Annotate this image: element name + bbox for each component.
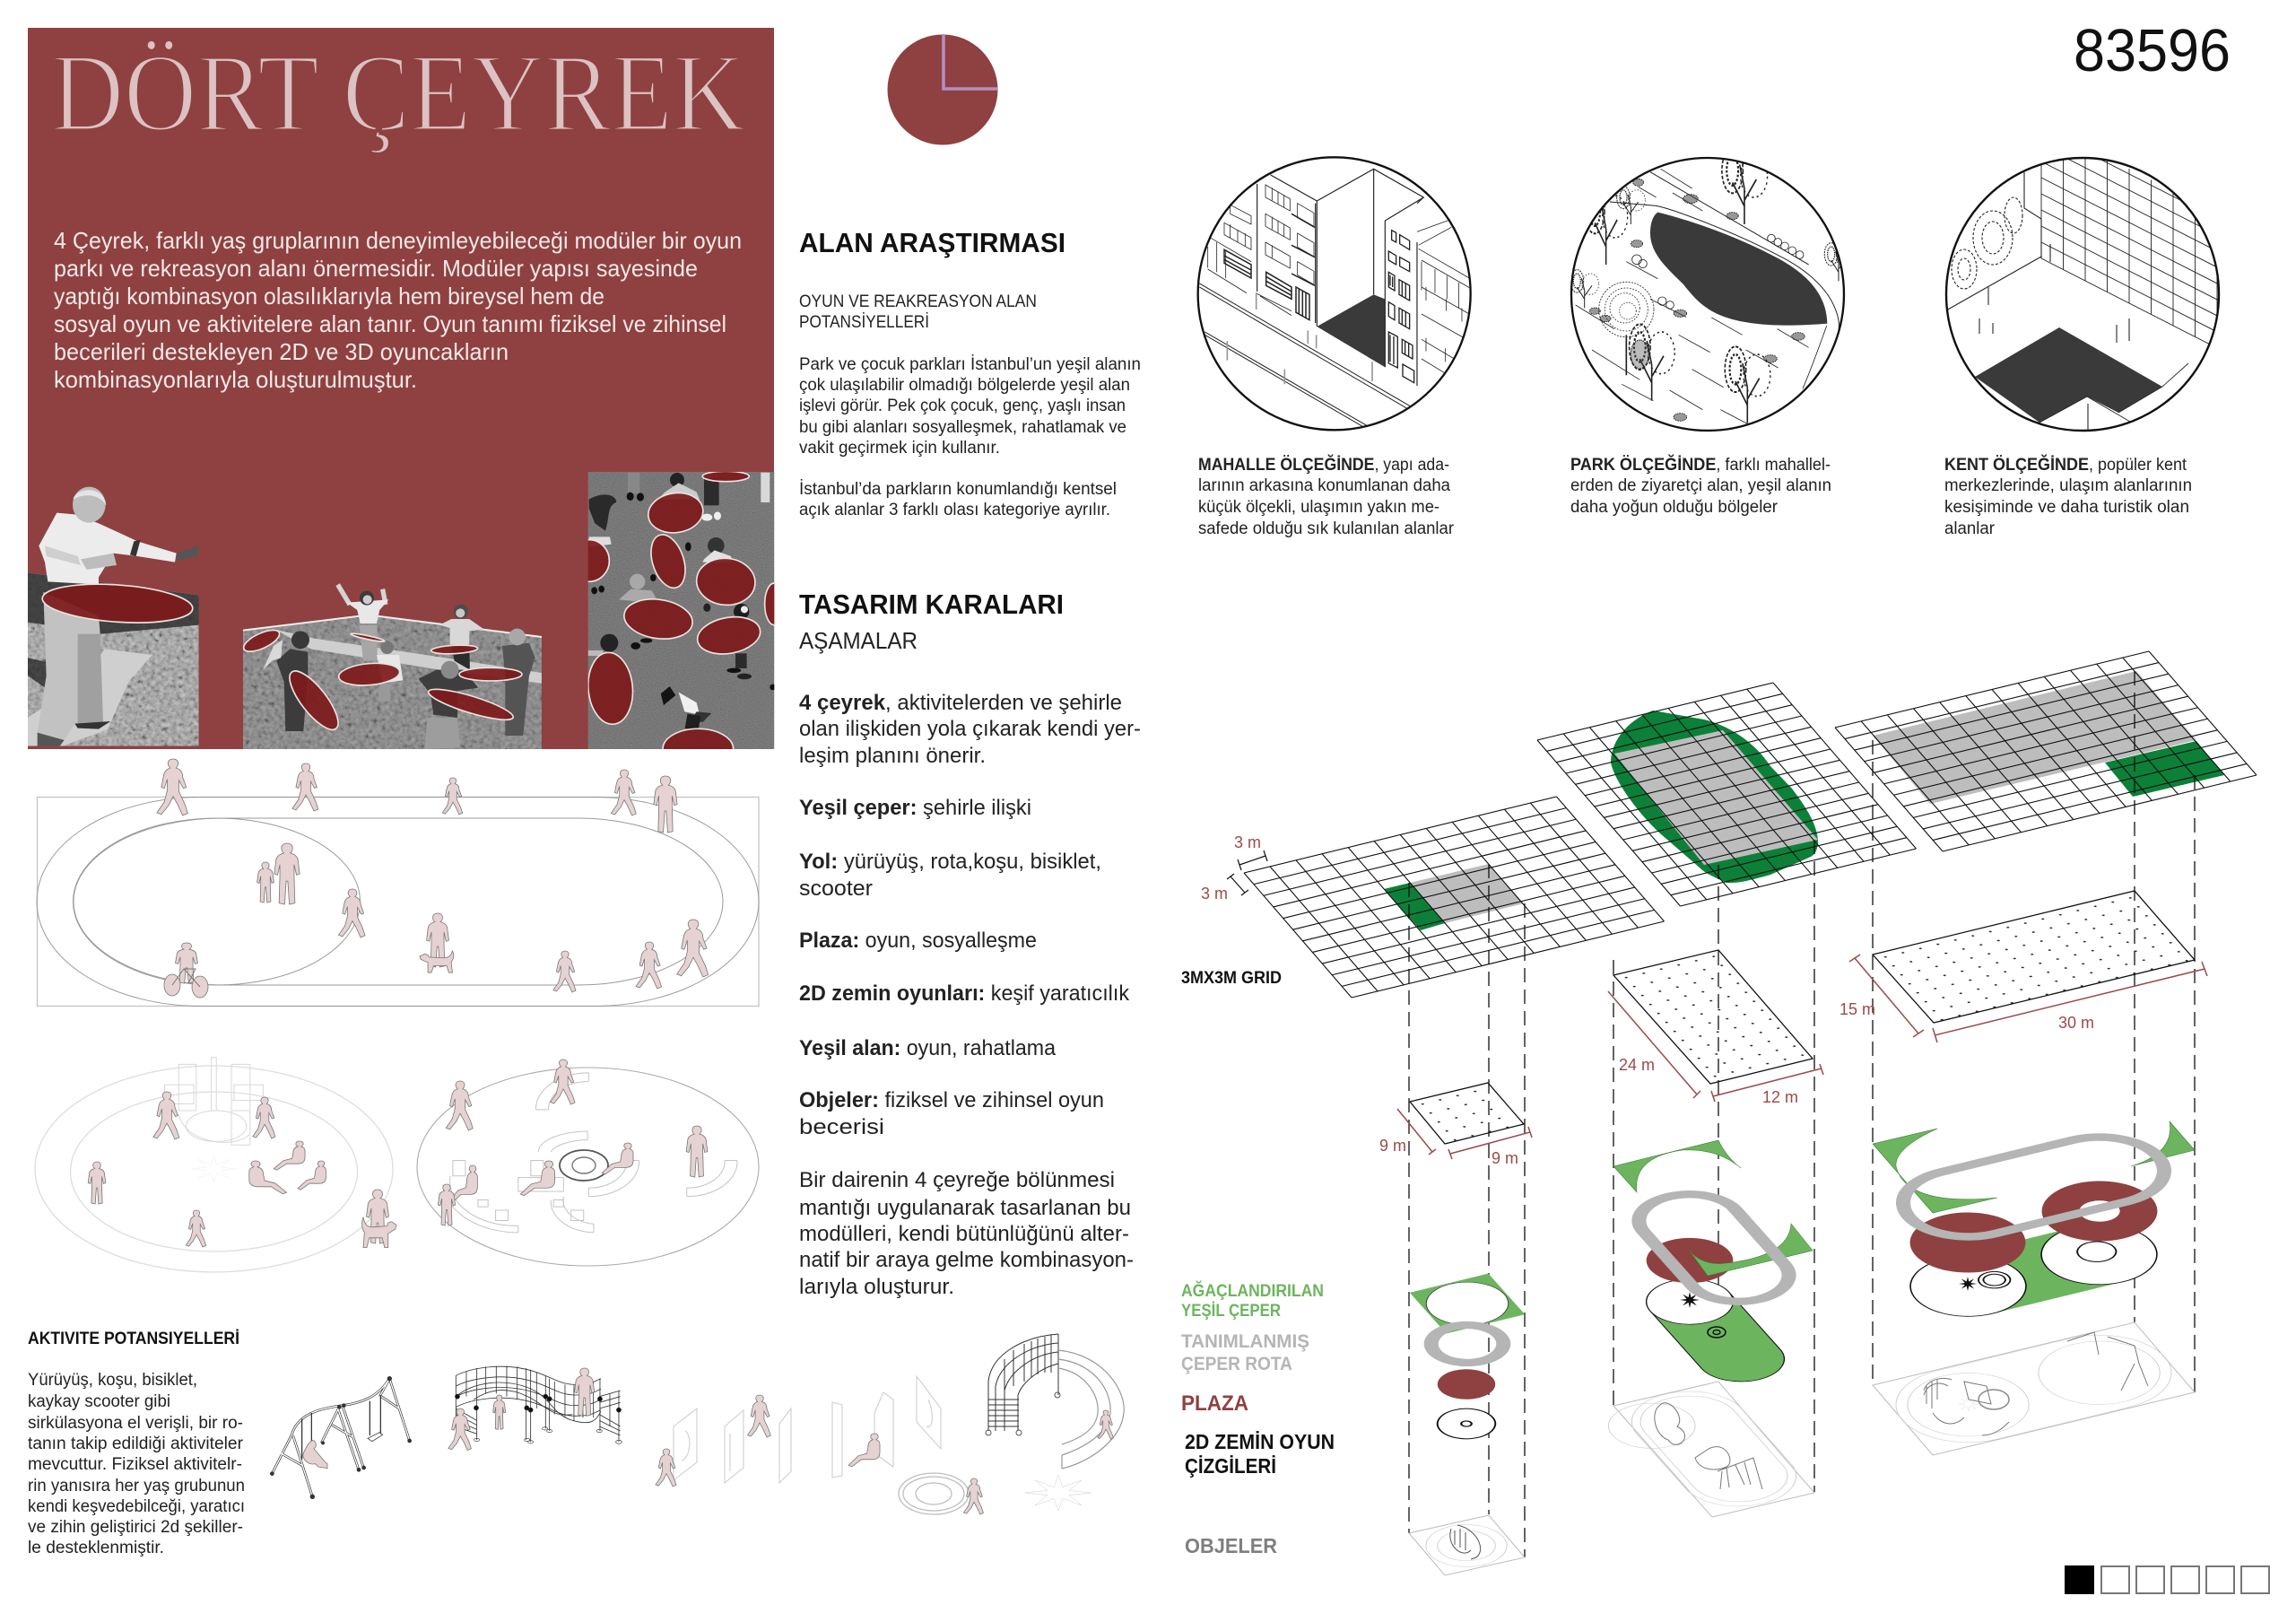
layer: green edge corners bbox=[1613, 1140, 1813, 1276]
dotted plot: 9 x 9 m bbox=[1379, 1083, 1532, 1167]
dotted plot: 9 x 9 m: 9 m bbox=[1379, 1137, 1406, 1155]
intro paragraph bbox=[54, 227, 742, 393]
caption: park scale bbox=[1570, 455, 1831, 517]
track diagram with users bbox=[37, 759, 759, 1007]
dotted plot: 30 x 15 m bbox=[1839, 891, 2207, 1042]
dark bushes bbox=[1589, 179, 1805, 421]
caption: neighbourhood scale bbox=[1198, 455, 1455, 538]
object: walls with holes bbox=[656, 1376, 941, 1487]
photo: man with hoop bbox=[28, 487, 199, 746]
text block: site research: ALAN ARAŞTIRMASI bbox=[799, 227, 1065, 258]
legend: layers: ÇİZGİLERİ bbox=[1185, 1454, 1276, 1478]
object: swing bbox=[270, 1376, 412, 1499]
hoop bbox=[41, 580, 194, 627]
text block: site research: Park ve çocuk parkları İstanbul’un yeşil alanın bbox=[799, 355, 1141, 374]
intro paragraph: 4 Çeyrek, farklı yaş gruplarının deneyimleyebileceği modüler bir oyun bbox=[54, 227, 742, 254]
benches bbox=[443, 1073, 737, 1233]
dotted plot: 30 x 15 m: 15 m bbox=[1839, 1000, 1875, 1018]
object: curved net and slide bbox=[986, 1334, 1124, 1469]
object: net wall bbox=[448, 1366, 622, 1451]
caption: city scale: KENT ÖLÇEĞİNDE, popüler kent bbox=[1944, 455, 2187, 475]
text block: design decisions: AŞAMALAR bbox=[799, 627, 918, 654]
text block: activity potentials: kaykay scooter gibi bbox=[28, 1392, 170, 1411]
layer: green capsule with 2d disc bbox=[1632, 1272, 1798, 1389]
text block: site research bbox=[799, 227, 1141, 519]
caption: neighbourhood scale: larının arkasına konumlanan daha bbox=[1198, 476, 1450, 495]
layer: 2d play lines bbox=[1428, 1404, 1505, 1443]
text block: site research: bu gibi alanları sosyalleşmek, rahatlamak ve bbox=[799, 418, 1126, 437]
legend: layers: TANIMLANMIŞ bbox=[1181, 1331, 1309, 1352]
title: DÖRT ÇEYREK bbox=[51, 31, 745, 154]
layer: route ring bbox=[1419, 1319, 1516, 1369]
photo: children from above bbox=[588, 472, 775, 749]
text block: site research: POTANSİYELLERİ bbox=[799, 313, 929, 332]
layer: route bbox=[1882, 1126, 2186, 1248]
people on track bbox=[157, 759, 709, 998]
layer: route bbox=[1622, 1186, 1805, 1310]
text block: design decisions: natif bir araya gelme kombinasyon- bbox=[799, 1248, 1134, 1272]
layer stack: column 2 bbox=[1592, 1140, 1815, 1522]
pie icon: one quarter bbox=[888, 34, 997, 145]
text block: design decisions: leşim planını önerir. bbox=[799, 744, 986, 768]
text block: activity potentials: le desteklenmiştir. bbox=[28, 1539, 164, 1557]
text block: activity potentials: rin yanısıra her yaş grubunun bbox=[28, 1477, 245, 1496]
label: 3mx3m grid: 3MX3M GRID bbox=[1181, 969, 1282, 988]
panels bbox=[164, 1058, 263, 1145]
intro paragraph: parkı ve rekreasyon alanı önermesidir. Modüler yapısı sayesinde bbox=[54, 255, 698, 282]
text block: activity potentials: AKTIVITE POTANSIYELLERİ bbox=[28, 1330, 239, 1348]
people bbox=[263, 585, 535, 749]
text block: site research: vakit geçirmek için kullanır. bbox=[799, 439, 1000, 458]
circle: neighbourhood scale bbox=[1198, 157, 1471, 430]
text block: design decisions: Yeşil çeper: şehirle ilişki bbox=[799, 796, 1031, 820]
dotted plot: 24 x 12 m bbox=[1608, 950, 1823, 1106]
dotted plot: 24 x 12 m: 24 m bbox=[1619, 1056, 1655, 1074]
text block: design decisions: Bir dairenin 4 çeyreğe bölünmesi bbox=[799, 1168, 1115, 1192]
circle: city scale bbox=[1944, 156, 2221, 432]
layer: objects bbox=[1592, 1382, 1815, 1522]
grid: park plan bbox=[1537, 683, 1916, 906]
caption: park scale: daha yoğun olduğu bölgeler bbox=[1570, 498, 1779, 517]
text block: activity potentials bbox=[28, 1330, 245, 1557]
text block: activity potentials: ve zihin geliştirici 2d şekiller- bbox=[28, 1518, 243, 1537]
child on swing bbox=[303, 1440, 327, 1469]
grid lines: 10 column lines bbox=[1537, 683, 1916, 906]
round module 1 bbox=[35, 1058, 396, 1272]
dotted plot: 30 x 15 m: 30 m bbox=[2058, 1014, 2094, 1032]
layer stack: column 1 bbox=[1409, 1274, 1525, 1575]
climbers bbox=[448, 1368, 595, 1451]
people bbox=[438, 1060, 708, 1225]
text block: design decisions: larıyla oluşturur. bbox=[799, 1275, 954, 1299]
text block: activity potentials: Yürüyüş, koşu, bisiklet, bbox=[28, 1371, 197, 1390]
layer stack: column 3 bbox=[1873, 1121, 2196, 1455]
object: floor ring and star bbox=[899, 1473, 1091, 1514]
layer: green capsule with 2d discs bbox=[1892, 1215, 2176, 1326]
text block: design decisions: mantığı uygulanarak tasarlanan bu bbox=[799, 1196, 1131, 1220]
layer: green edge bbox=[1410, 1274, 1525, 1333]
caption: city scale: merkezlerinde, ulaşım alanlarının bbox=[1944, 476, 2192, 495]
text block: site research: İstanbul’da parkların konumlandığı kentsel bbox=[799, 480, 1117, 499]
legend: layers: YEŞİL ÇEPER bbox=[1181, 1300, 1281, 1321]
text block: site research: OYUN VE REAKREASYON ALAN bbox=[799, 292, 1037, 311]
play shapes bbox=[1680, 1292, 1726, 1338]
caption: city scale: kesişiminde ve daha turistik olan bbox=[1944, 498, 2189, 517]
legend: layers: AĞAÇLANDIRILAN bbox=[1181, 1280, 1324, 1301]
number 83596: 83596 bbox=[2074, 17, 2231, 84]
text block: design decisions: becerisi bbox=[799, 1115, 884, 1139]
3 m dimensions: 3 m bbox=[1201, 885, 1228, 903]
caption: park scale: PARK ÖLÇEĞİNDE, farklı mahallel- bbox=[1570, 455, 1831, 475]
text block: design decisions: 2D zemin oyunları: keşif yaratıcılık bbox=[799, 981, 1130, 1006]
photo: family with hoops bbox=[240, 585, 542, 751]
caption: neighbourhood scale: safede olduğu sık kulanılan alanlar bbox=[1198, 519, 1455, 538]
dotted plot: 9 x 9 m: 9 m bbox=[1492, 1149, 1518, 1167]
paved area bbox=[1650, 213, 1827, 326]
intro paragraph: yaptığı kombinasyon olasılıklarıyla hem bireysel hem de bbox=[54, 283, 604, 310]
text block: design decisions: Yeşil alan: oyun, rahatlama bbox=[799, 1036, 1057, 1060]
people bbox=[88, 1092, 396, 1248]
text block: design decisions: modülleri, kendi bütünlüğünü alter- bbox=[799, 1222, 1129, 1246]
intro paragraph: sosyal oyun ve aktivitelere alan tanır. Oyun tanımı fiziksel ve zihinsel bbox=[54, 310, 726, 337]
grid: neighbourhood plan bbox=[1201, 797, 1665, 998]
caption: neighbourhood scale: küçük ölçekli, ulaşımın yakın me- bbox=[1198, 498, 1439, 517]
text block: activity potentials: sirkülasyona el verişli, bir ro- bbox=[28, 1414, 243, 1433]
round module 2 bbox=[417, 1060, 759, 1266]
legend: layers: 2D ZEMİN OYUN bbox=[1185, 1430, 1335, 1453]
text block: design decisions: olan ilişkiden yola çıkarak kendi yer- bbox=[799, 717, 1141, 741]
text block: site research: çok ulaşılabilir olmadığı bölgelerde yeşil alan bbox=[799, 376, 1130, 395]
star bbox=[1959, 1277, 1977, 1291]
legend: layers: ÇEPER ROTA bbox=[1181, 1354, 1292, 1374]
text block: site research: açık alanlar 3 farklı olası kategoriye ayrılır. bbox=[799, 501, 1110, 519]
text block: site research: işlevi görür. Pek çok çocuk, genç, yaşlı insan bbox=[799, 397, 1126, 415]
layer: plazas bbox=[1891, 1184, 2152, 1283]
grid lines: 16 row lines bbox=[1537, 683, 1916, 906]
intro paragraph: becerileri destekleyen 2D ve 3D oyuncakların bbox=[54, 338, 509, 365]
swing frame bbox=[270, 1376, 412, 1499]
layer: objects bbox=[1873, 1322, 2196, 1455]
legend: layers: OBJELER bbox=[1185, 1534, 1277, 1557]
layer: objects bbox=[1409, 1515, 1525, 1575]
3 m dimensions: 3 m bbox=[1234, 833, 1261, 851]
hoops bbox=[588, 472, 775, 749]
text block: design decisions: scooter bbox=[799, 876, 873, 901]
text block: activity potentials: mevcuttur. Fiziksel aktivitelr- bbox=[28, 1455, 242, 1474]
layer: green edge corners bbox=[1873, 1121, 2195, 1213]
text block: design decisions: Plaza: oyun, sosyalleşme bbox=[799, 929, 1037, 953]
layer: plaza bbox=[1428, 1365, 1505, 1404]
text block: design decisions: Yol: yürüyüş, rota,koşu, bisiklet, bbox=[799, 850, 1101, 874]
text block: design decisions: Objeler: fiziksel ve zihinsel oyun bbox=[799, 1088, 1104, 1112]
3 m dimensions bbox=[1201, 833, 1267, 903]
text block: activity potentials: tanın takip edildiği aktiviteler bbox=[28, 1435, 244, 1453]
dotted plot: 24 x 12 m: 12 m bbox=[1762, 1088, 1798, 1106]
hoops bbox=[240, 626, 522, 737]
caption: park scale: erden de ziyaretçi alan, yeşil alanın bbox=[1570, 476, 1831, 495]
text block: design decisions bbox=[799, 589, 1141, 1299]
intro paragraph: kombinasyonlarıyla oluşturulmuştur. bbox=[54, 366, 417, 393]
grid: city plan bbox=[1835, 651, 2257, 851]
text block: activity potentials: kendi keşvedebilceği, yaratıcı bbox=[28, 1497, 245, 1516]
panel: red intro panel bbox=[28, 28, 784, 770]
legend: layers: PLAZA bbox=[1181, 1391, 1248, 1416]
text block: design decisions: 4 çeyrek, aktivitelerden ve şehirle bbox=[799, 691, 1122, 715]
caption: city scale bbox=[1944, 455, 2192, 538]
net lines bbox=[455, 1366, 622, 1443]
trees bbox=[1570, 148, 1853, 423]
text block: design decisions: TASARIM KARALARI bbox=[799, 589, 1064, 620]
circle: park scale bbox=[1570, 148, 1853, 431]
layer: plaza bbox=[1632, 1231, 1747, 1290]
paths and hedges bbox=[1576, 169, 1839, 424]
caption: city scale: alanlar bbox=[1944, 519, 1996, 538]
pagination boxes bbox=[2066, 1566, 2269, 1593]
children bbox=[588, 473, 776, 731]
legend: layers bbox=[1181, 1280, 1335, 1557]
projection lines bbox=[1409, 671, 2195, 1557]
man figure bbox=[38, 487, 199, 746]
caption: neighbourhood scale: MAHALLE ÖLÇEĞİNDE, yapı ada- bbox=[1198, 455, 1449, 475]
